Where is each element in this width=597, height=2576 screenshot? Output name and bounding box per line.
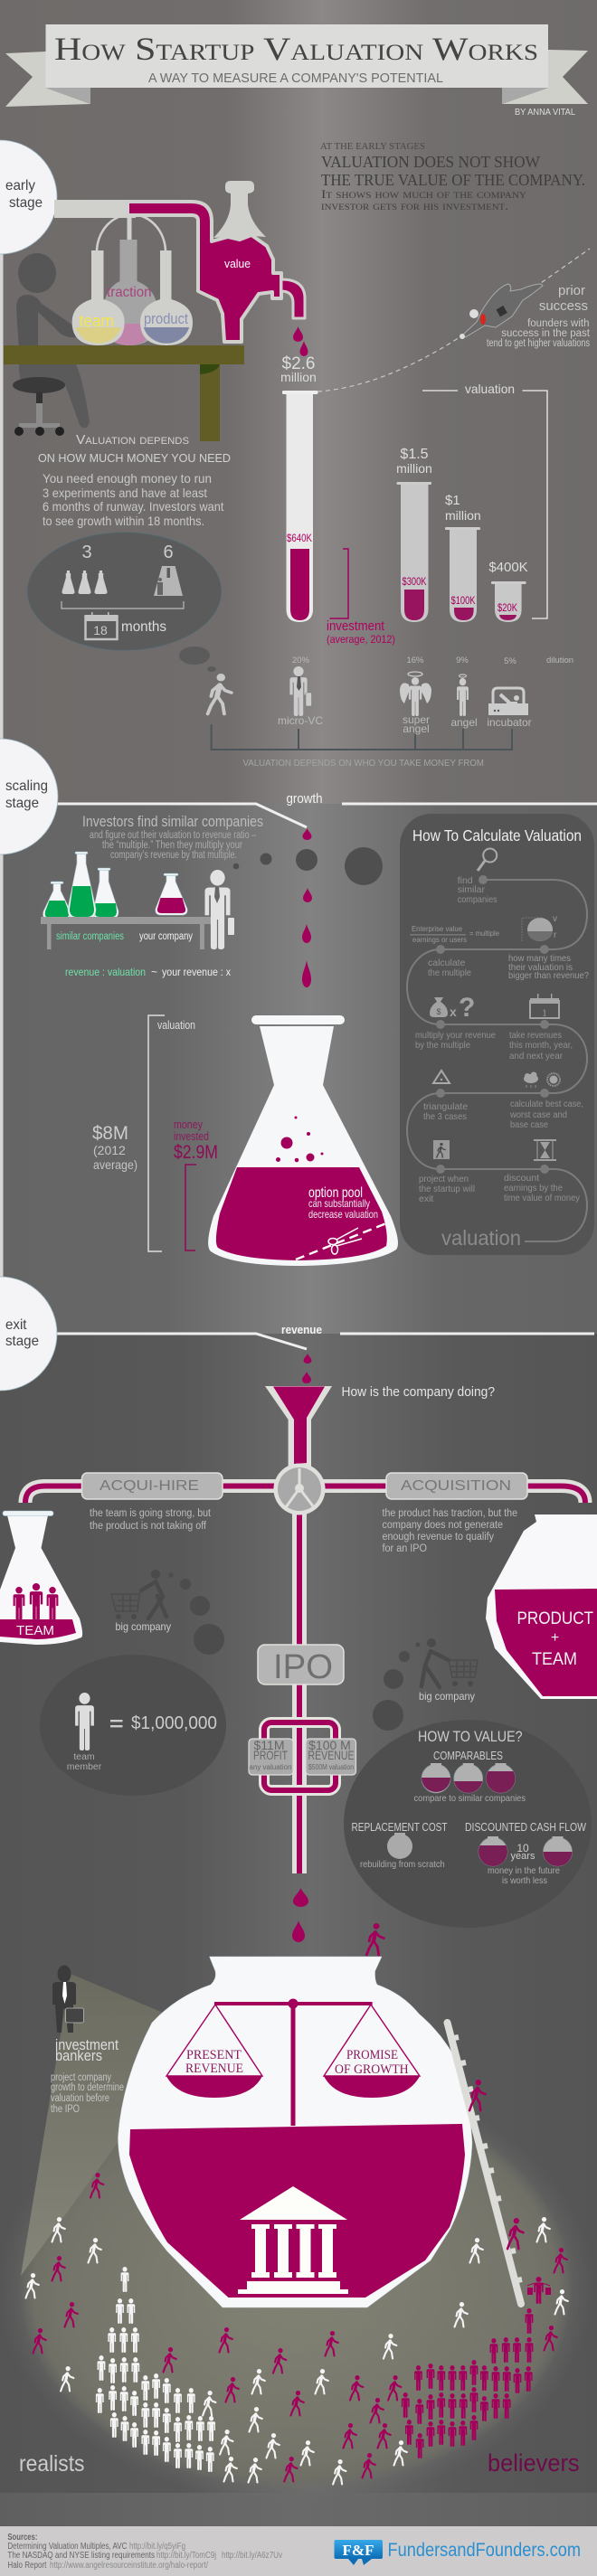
bracket: investment bbox=[327, 549, 395, 646]
text block: prior success: founders with bbox=[527, 318, 590, 329]
flask: team: TEAM bbox=[16, 1623, 54, 1638]
sources: Halo Report bbox=[7, 2561, 47, 2571]
box: revenue path bbox=[306, 1738, 356, 1775]
bubble: how to value: HOW TO VALUE? bbox=[418, 1728, 523, 1745]
icon: scissors bbox=[328, 1228, 362, 1254]
discounted cash flow: 10 bbox=[516, 1842, 529, 1854]
drops: into funnel bbox=[302, 1354, 311, 1383]
bracket: money invested: $2.9M bbox=[174, 1142, 218, 1163]
box: revenue path: REVENUE bbox=[308, 1748, 355, 1762]
icon: micro-VC investor bbox=[289, 666, 311, 716]
illustration: similar companies flasks bbox=[43, 852, 118, 920]
icon: incubator bbox=[488, 688, 528, 715]
box: profit path bbox=[249, 1738, 293, 1775]
heading: valuation depends on money bbox=[38, 432, 231, 465]
table with man bbox=[41, 870, 234, 949]
investor labels: angel bbox=[403, 722, 430, 735]
bubble: team member value: member bbox=[67, 1761, 102, 1772]
step: multiply your revenue bbox=[415, 1030, 496, 1051]
question: how is the company doing: How is the company doing? bbox=[342, 1385, 495, 1400]
icon: three flasks team traction product bbox=[72, 214, 193, 345]
investor labels bbox=[278, 713, 532, 735]
label: believers: believers bbox=[488, 2449, 580, 2477]
comparables: COMPARABLES bbox=[433, 1750, 503, 1762]
text block: investment bankers bbox=[51, 2036, 124, 2115]
icon: big company shopper right: big company bbox=[419, 1690, 475, 1703]
box: profit path: $11M bbox=[254, 1738, 284, 1752]
IPO box: IPO bbox=[273, 1648, 333, 1686]
bubble: how to value bbox=[344, 1720, 592, 1928]
formula: revenue to valuation ratio: revenue : valuation bbox=[65, 966, 146, 978]
caption: who you take money from: VALUATION DEPENDS ON WHO YOU TAKE MONEY FROM bbox=[242, 758, 484, 769]
bracket: valuation $8M: valuation bbox=[157, 1019, 195, 1032]
step: take revenues: take revenues bbox=[509, 1030, 562, 1041]
chart: super angel test tube: $300K bbox=[402, 575, 427, 588]
pipe: acqui-hire branch bbox=[25, 1486, 280, 1503]
investor labels: micro-VC bbox=[278, 714, 323, 727]
icon: value vessel with pipe: value bbox=[224, 258, 251, 270]
bracket: valuation $8M bbox=[92, 1015, 195, 1251]
text block: acquisition explanation: for an IPO bbox=[382, 1543, 427, 1554]
text block: true value statement: THE TRUE VALUE OF THE COMPANY. bbox=[321, 171, 585, 189]
text block: true value statement bbox=[320, 142, 585, 212]
formula: revenue to valuation ratio: your revenue : x bbox=[162, 966, 231, 978]
step: triangulate: the 3 cases bbox=[423, 1111, 467, 1122]
step: calculate best case bbox=[509, 1099, 583, 1130]
icon: investment banker bbox=[52, 1966, 83, 2033]
step: how many times: their valuation is bbox=[508, 962, 573, 973]
icon: stock exchange building bbox=[238, 2186, 348, 2294]
step: calculate the multiple: the multiple bbox=[428, 967, 471, 978]
process path bbox=[407, 880, 587, 1241]
dilution row: 20% bbox=[292, 656, 310, 665]
stage marker: early stage: early bbox=[5, 178, 35, 193]
bracket: investment: (average, 2012) bbox=[327, 633, 395, 646]
step: multiply your revenue: multiply your revenue bbox=[415, 1030, 496, 1041]
icon: big company shopper left bbox=[111, 1570, 224, 1655]
step: multiple formula: Enterprise value bbox=[412, 924, 462, 933]
step: how many times bbox=[508, 953, 589, 981]
logo: Funders and Founders bbox=[335, 2540, 581, 2565]
icon: rain cloud and sun bbox=[524, 1072, 560, 1088]
text block: investment bankers: project company bbox=[51, 2072, 111, 2083]
icon: money bag times question: x bbox=[450, 1005, 457, 1019]
step: how many times: bigger than revenue? bbox=[508, 970, 589, 981]
step: multiply your revenue: by the multiple bbox=[415, 1040, 470, 1051]
dashed growth curve bbox=[317, 249, 590, 392]
step: how many times: how many times bbox=[508, 953, 571, 964]
icon: magnifier bbox=[478, 848, 497, 871]
pipe: acquisition branch bbox=[317, 1486, 585, 1503]
icon: jar valuation over revenue: r bbox=[554, 930, 557, 940]
text block: prior success: prior bbox=[558, 283, 585, 298]
icon: big company shopper left: big company bbox=[116, 1620, 171, 1633]
text block: runway explanation: 3 experiments and have at least bbox=[43, 486, 207, 500]
thought bubble: 3 experiments 6 months: 3 bbox=[81, 543, 92, 562]
icon: money bag times question bbox=[430, 993, 475, 1023]
labels: similar companies / your company: your company bbox=[139, 931, 193, 942]
icon: money bag times question: ? bbox=[459, 993, 475, 1023]
bracket: investment: investment bbox=[327, 618, 385, 634]
flask: product plus team bbox=[486, 1514, 597, 1699]
icon: value vessel with pipe bbox=[54, 181, 305, 342]
background: lower band bbox=[0, 2493, 597, 2526]
bubble: team member value: $1,000,000 bbox=[131, 1713, 217, 1733]
big jar bbox=[118, 1957, 472, 2307]
section line: revenue: revenue bbox=[281, 1323, 322, 1336]
chart: micro-VC test tube bbox=[280, 354, 318, 622]
replacement cost bbox=[351, 1821, 448, 1870]
bracket: valuation $8M: $8M bbox=[92, 1123, 128, 1144]
funnel bbox=[265, 1386, 332, 1469]
drops from spout bbox=[293, 326, 308, 356]
bracket: valuation $8M: average) bbox=[93, 1157, 137, 1172]
icon: three flasks team traction product: product bbox=[144, 310, 188, 327]
desk bbox=[4, 345, 244, 441]
sources: Determining Valuation Multiples, AVC bbox=[7, 2542, 127, 2552]
text block: investors find similar companies: Investors find similar companies bbox=[82, 813, 263, 830]
icon: calendar bbox=[530, 994, 559, 1019]
pipe down to IPO bbox=[292, 1510, 307, 1873]
icon: flying superhero bbox=[460, 284, 543, 339]
text block: true value statement: VALUATION DOES NOT SHOW bbox=[321, 153, 540, 171]
step: discount earnings: discount bbox=[504, 1173, 539, 1184]
icon: money bag times question: $ bbox=[436, 1007, 441, 1016]
IPO requirement loop bbox=[264, 1722, 336, 1790]
process nodes bbox=[436, 875, 549, 1174]
chart: angel test tube bbox=[445, 493, 481, 622]
sources: http://bit.ly/TomC9j bbox=[156, 2551, 216, 2561]
bracket: money invested: money bbox=[174, 1118, 204, 1131]
label box: acqui-hire bbox=[81, 1473, 223, 1499]
investor labels: super bbox=[403, 713, 430, 726]
scales of value: PROMISE bbox=[346, 2048, 398, 2062]
labels: similar companies / your company: similar companies bbox=[56, 931, 124, 942]
text block: investment bankers: growth to determine bbox=[51, 2082, 124, 2093]
icon: person at desk bbox=[13, 253, 90, 436]
chart: super angel test tube bbox=[396, 447, 432, 622]
bracket: valuation: valuation bbox=[465, 382, 515, 396]
title: How Startup Valuation Works bbox=[54, 31, 538, 67]
icon: person carrying buckets bbox=[527, 2277, 551, 2304]
heading: valuation depends on money: ON HOW MUCH MONEY YOU NEED bbox=[38, 452, 231, 465]
chart: angel test tube: million bbox=[445, 508, 481, 523]
icon: three flasks team traction product: traction bbox=[107, 285, 152, 300]
text block: acquisition explanation: company does not generate bbox=[382, 1520, 503, 1531]
text block: investors find similar companies: company’s revenue by that multiple. bbox=[110, 850, 237, 861]
section line: growth: growth bbox=[286, 792, 322, 807]
crowd: believers bbox=[33, 2173, 567, 2481]
chart: incubator test tube: $20K bbox=[498, 601, 517, 614]
text block: acqui-hire explanation bbox=[90, 1508, 212, 1532]
icon: jar valuation over revenue bbox=[522, 914, 557, 941]
flask: team bbox=[0, 1511, 82, 1645]
sources: http://www.angelresourceinstitute.org/halo-report/ bbox=[50, 2561, 208, 2571]
step: take revenues: and next year bbox=[509, 1051, 563, 1062]
crowd: realists bbox=[25, 2217, 568, 2485]
step: project exit bbox=[419, 1174, 475, 1204]
box: revenue path: $500M valuation bbox=[308, 1763, 354, 1771]
investor labels: incubator bbox=[487, 716, 532, 729]
text block: investment bankers: investment bbox=[55, 2036, 118, 2053]
label box: acquisition: ACQUISITION bbox=[401, 1478, 511, 1494]
text block: prior success: success in the past bbox=[501, 328, 591, 339]
box: profit path: any valuation bbox=[249, 1763, 292, 1771]
thought bubble: 3 experiments 6 months bbox=[27, 533, 221, 672]
chart: angel test tube: $100K bbox=[450, 594, 476, 607]
stage marker: scaling stage: stage bbox=[5, 796, 39, 811]
icon: three flasks team traction product: team bbox=[80, 312, 114, 330]
flask: product plus team: + bbox=[551, 1630, 559, 1646]
dilution row: dilution bbox=[546, 656, 573, 665]
step: find similar companies: companies bbox=[458, 894, 498, 905]
chart: incubator test tube: $400K bbox=[488, 560, 528, 575]
step: take revenues bbox=[509, 1030, 573, 1062]
thought bubble: 3 experiments 6 months: 18 bbox=[93, 623, 108, 637]
label: realists: realists bbox=[19, 2451, 85, 2477]
text block: acqui-hire explanation: the product is not taking off bbox=[90, 1521, 207, 1532]
chart: micro-VC test tube: million bbox=[280, 370, 317, 384]
step: triangulate: triangulate bbox=[423, 1101, 468, 1112]
text block: runway explanation: to see growth within 18 months. bbox=[43, 514, 204, 528]
dilution row: 16% bbox=[406, 656, 424, 665]
background: early stage section bbox=[0, 0, 597, 804]
step: find similar companies bbox=[458, 875, 498, 905]
step: calculate best case: base case bbox=[510, 1119, 548, 1130]
text block: investors find similar companies: and figure out their valuation to revenue ratio – bbox=[90, 830, 256, 841]
investor labels: angel bbox=[450, 716, 478, 729]
stage marker: early stage: stage bbox=[9, 195, 43, 211]
tree connector bbox=[212, 724, 512, 750]
text block: investors find similar companies: the “multiple.” Then they multiply your bbox=[102, 840, 242, 851]
dilution row: 5% bbox=[504, 656, 516, 666]
spotlight: glow on crowd bbox=[0, 1974, 594, 2505]
stage marker: scaling stage bbox=[0, 739, 58, 854]
icon: exit sign bbox=[433, 1140, 450, 1159]
chart: super angel test tube: million bbox=[396, 461, 432, 476]
scales of value: REVENUE bbox=[185, 2062, 243, 2076]
step: multiple formula: earnings or users bbox=[412, 935, 467, 944]
text block: investment bankers: valuation before bbox=[51, 2093, 109, 2104]
icon: ladder bbox=[447, 2023, 522, 2304]
stage marker: scaling stage: scaling bbox=[5, 778, 48, 794]
step: calculate best case: calculate best case, bbox=[510, 1099, 583, 1109]
bracket: money invested: invested bbox=[174, 1130, 209, 1143]
formula: revenue to valuation ratio: ~ bbox=[151, 966, 157, 978]
sources bbox=[7, 2533, 282, 2571]
text block: true value statement: AT THE EARLY STAGES bbox=[320, 142, 425, 152]
icon: jar valuation over revenue: v bbox=[553, 914, 557, 924]
sources: The NASDAQ and NYSE listing requirements bbox=[7, 2551, 155, 2561]
stage marker: exit stage bbox=[0, 1277, 57, 1391]
drops: growth into flask bbox=[302, 828, 312, 987]
step: multiple formula: = multiple bbox=[469, 929, 499, 938]
text block: prior success: success bbox=[539, 298, 588, 314]
background: exit stage section bbox=[0, 1334, 597, 2493]
chart: angel test tube: $1 bbox=[445, 493, 460, 508]
author credit: BY ANNA VITAL bbox=[515, 107, 575, 118]
bracket: money invested bbox=[174, 1118, 218, 1250]
dilution row: 9% bbox=[456, 656, 469, 665]
illustration: big flask with option pool: decrease valuation bbox=[308, 1208, 378, 1221]
step: calculate best case: worst case and bbox=[509, 1109, 567, 1120]
chart: incubator test tube bbox=[488, 560, 528, 622]
bubble: team member value bbox=[40, 1655, 226, 1796]
section line: revenue bbox=[56, 1323, 594, 1349]
replacement cost: REPLACEMENT COST bbox=[351, 1821, 448, 1834]
text block: investors find similar companies bbox=[82, 813, 263, 861]
stage marker: exit stage: exit bbox=[5, 1317, 27, 1333]
replacement cost: rebuilding from scratch bbox=[360, 1859, 445, 1870]
step: project exit: the startup will bbox=[419, 1184, 475, 1194]
text block: acqui-hire explanation: the team is going strong, but bbox=[90, 1508, 212, 1519]
sources: http://bit.ly/A6z7Uv bbox=[222, 2551, 282, 2561]
box: profit path: PROFIT bbox=[253, 1748, 288, 1762]
step: calculate the multiple bbox=[428, 958, 471, 978]
text block: acquisition explanation bbox=[382, 1508, 517, 1554]
chart: micro-VC test tube: $2.6 bbox=[282, 354, 315, 373]
text block: runway explanation bbox=[43, 471, 224, 528]
discounted cash flow: is worth less bbox=[502, 1875, 547, 1886]
IPO box bbox=[258, 1645, 344, 1686]
stage marker: early stage bbox=[0, 140, 57, 254]
heading: valuation depends on money: Valuation depends bbox=[76, 432, 189, 448]
sources: http://bit.ly/q5yiFg bbox=[129, 2542, 185, 2552]
formula: revenue to valuation ratio bbox=[65, 966, 231, 978]
box: revenue path: $100 M bbox=[308, 1738, 351, 1752]
step: multiple formula bbox=[410, 924, 499, 944]
text block: runway explanation: 6 months of runway. Investors want bbox=[43, 499, 224, 514]
scales of value bbox=[166, 1998, 420, 2126]
icon: super angel bbox=[400, 672, 431, 716]
drops: into big jar bbox=[292, 1888, 308, 1942]
step: take revenues: this month, year, bbox=[509, 1040, 573, 1051]
bubble: team member value: team bbox=[73, 1751, 95, 1762]
scales of value: OF GROWTH bbox=[335, 2062, 409, 2077]
icon: calendar: 1 bbox=[542, 1006, 547, 1019]
step: project exit: exit bbox=[419, 1194, 433, 1204]
text block: runway explanation: You need enough money to run bbox=[43, 471, 212, 486]
panel: how to calculate valuation bbox=[400, 814, 594, 1255]
icon: big company shopper right bbox=[373, 1638, 478, 1731]
section line: growth bbox=[56, 792, 597, 827]
step: discount earnings: time value of money bbox=[504, 1193, 581, 1203]
stage marker: exit stage: stage bbox=[5, 1334, 39, 1349]
step: find similar companies: similar bbox=[458, 884, 486, 895]
thought bubble: 3 experiments 6 months: months bbox=[121, 619, 166, 635]
result: valuation: valuation bbox=[441, 1226, 521, 1250]
step: discount earnings bbox=[504, 1173, 581, 1203]
label box: acqui-hire: ACQUI-HIRE bbox=[100, 1478, 199, 1494]
text block: true value statement: It shows how much of the company bbox=[321, 187, 527, 201]
illustration: big flask with option pool: can substantially bbox=[308, 1197, 370, 1210]
chart: micro-VC test tube: $640K bbox=[287, 532, 312, 544]
text block: investment bankers: the IPO bbox=[51, 2104, 80, 2115]
step: project exit: project when bbox=[419, 1174, 469, 1184]
climbers bbox=[366, 1923, 524, 2249]
text block: acquisition explanation: enough revenue to qualify bbox=[382, 1532, 494, 1543]
step: discount earnings: earnings by the bbox=[504, 1183, 563, 1194]
discounted cash flow: money in the future bbox=[488, 1865, 560, 1876]
comparables bbox=[414, 1750, 526, 1804]
bracket: valuation $8M: (2012 bbox=[93, 1143, 126, 1157]
title banner bbox=[5, 24, 588, 107]
step: calculate the multiple: calculate bbox=[428, 958, 466, 968]
discounted cash flow bbox=[465, 1821, 586, 1886]
step: find similar companies: find bbox=[458, 875, 473, 886]
icon: hourglass bbox=[534, 1140, 556, 1160]
icon: walking founder bbox=[208, 674, 232, 714]
text block: investment bankers: bankers bbox=[55, 2047, 102, 2064]
comparables: compare to similar companies bbox=[414, 1793, 526, 1804]
text block: true value statement: investor gets for his investment. bbox=[321, 199, 508, 212]
icon: triangle bbox=[433, 1071, 450, 1083]
thought bubble: 3 experiments 6 months: 6 bbox=[163, 543, 174, 562]
thought dots bbox=[233, 847, 383, 885]
dilution row bbox=[292, 656, 573, 666]
flask: product plus team: TEAM bbox=[532, 1650, 577, 1669]
logo: Funders and Founders: F&F bbox=[343, 2542, 374, 2559]
footer bbox=[0, 2526, 597, 2576]
chart: super angel test tube: $1.5 bbox=[400, 447, 429, 462]
bracket: valuation bbox=[422, 382, 547, 618]
scales of value: PRESENT bbox=[186, 2048, 242, 2062]
illustration: big flask with option pool bbox=[208, 1015, 398, 1266]
valve bbox=[273, 1463, 326, 1515]
sources: Sources: bbox=[7, 2533, 37, 2543]
illustration: your company flask bbox=[156, 873, 187, 915]
background: scaling stage section bbox=[0, 804, 597, 1334]
text block: prior success bbox=[487, 283, 591, 349]
subtitle: A WAY TO MEASURE A COMPANY'S POTENTIAL bbox=[148, 71, 443, 86]
label box: acquisition bbox=[386, 1473, 527, 1499]
text block: acquisition explanation: the product has traction, but the bbox=[382, 1508, 517, 1519]
icon: angel bbox=[457, 675, 469, 716]
step: triangulate bbox=[423, 1101, 468, 1122]
labels: similar companies / your company bbox=[56, 931, 193, 942]
illustration: big flask with option pool: option pool bbox=[308, 1185, 363, 1201]
discounted cash flow: years bbox=[511, 1851, 535, 1862]
